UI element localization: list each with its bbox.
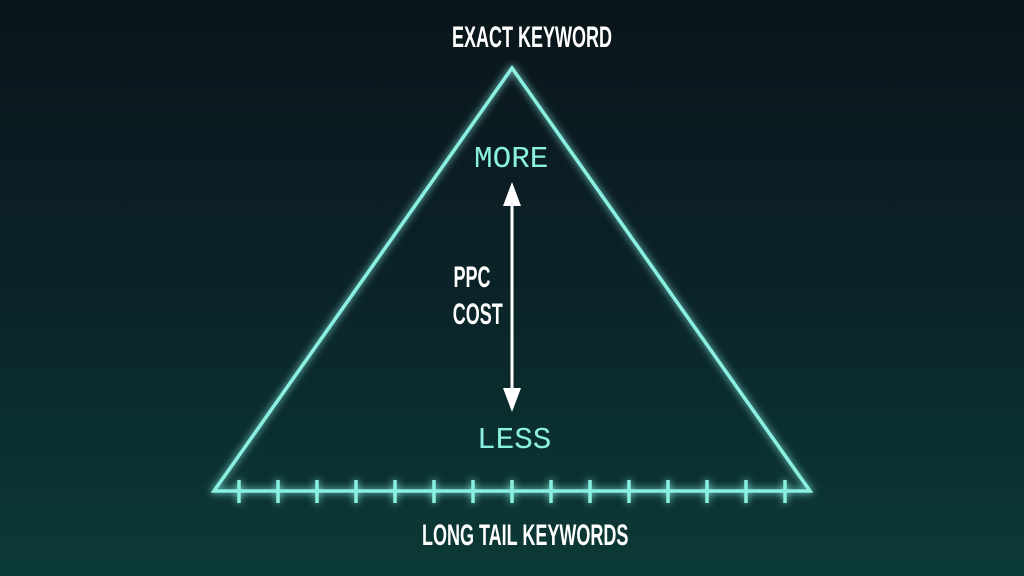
label: ppc cost bbox=[453, 261, 503, 331]
title: long tail keywords: LONG TAIL KEYWORDS bbox=[422, 519, 628, 552]
label: ppc cost: COST bbox=[453, 298, 503, 331]
label: more: MORE bbox=[474, 142, 548, 177]
title: exact keyword: EXACT KEYWORD bbox=[452, 21, 612, 54]
label: less: LESS bbox=[477, 423, 551, 458]
label: ppc cost: PPC bbox=[453, 261, 491, 294]
arrow: ppc cost bbox=[503, 182, 521, 412]
